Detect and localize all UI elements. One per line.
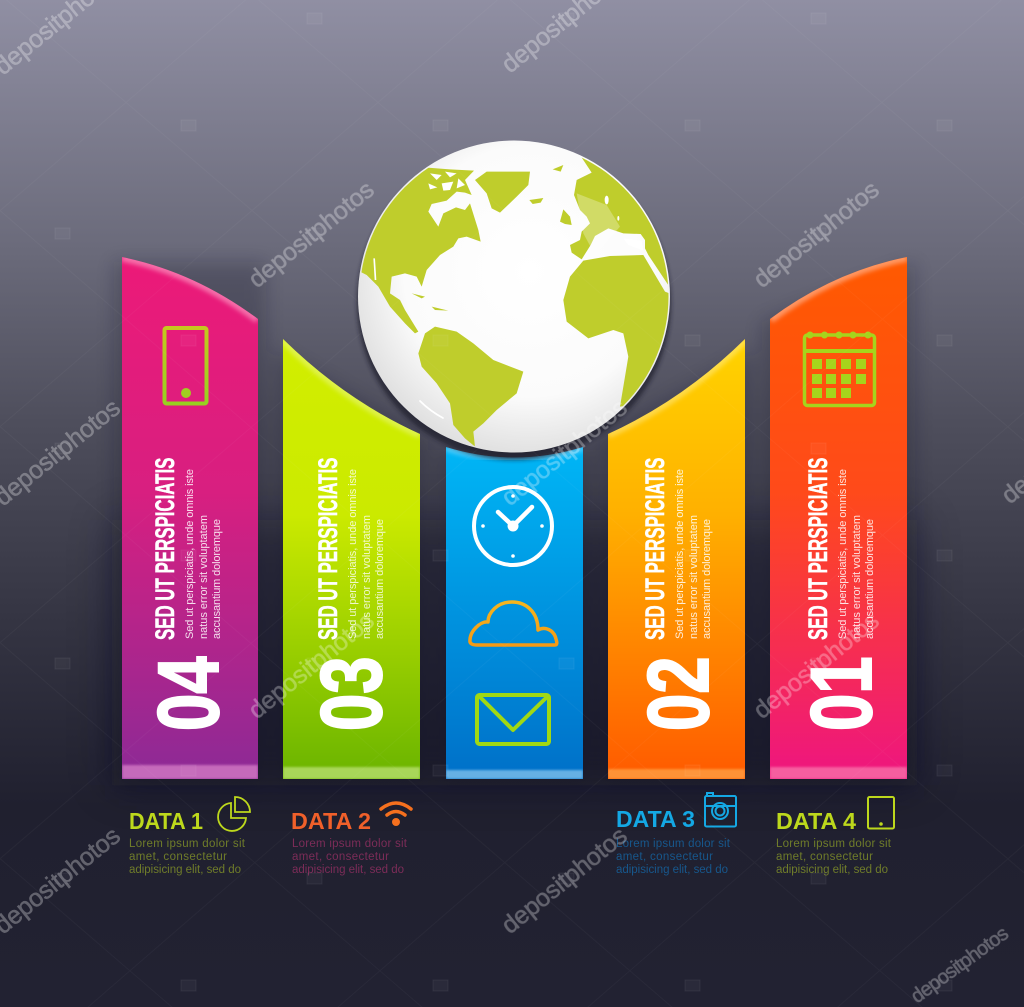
globe	[357, 140, 687, 452]
watermarks: depositphotos	[496, 394, 633, 512]
body text: Sed ut perspiciatis, unde omnis iste	[837, 469, 849, 639]
body text: accusantium doloremque	[864, 519, 876, 639]
text: Lorem ipsum dolor sit	[776, 838, 892, 850]
text	[616, 838, 731, 876]
body text	[837, 469, 876, 639]
heading: DATA 3	[616, 806, 695, 832]
text: amet, consectetur	[292, 851, 389, 863]
body text: natus error sit voluptatem	[198, 515, 210, 639]
heading: SED UT PERSPICIATIS	[150, 458, 180, 640]
number 04: 04	[141, 656, 237, 731]
legend: data 1	[129, 797, 250, 876]
text: adipisicing elit, sed do	[776, 864, 888, 876]
text: adipisicing elit, sed do	[616, 864, 728, 876]
icon: envelope	[477, 695, 549, 744]
text: Lorem ipsum dolor sit	[616, 838, 731, 850]
legend: data 4	[776, 797, 894, 876]
text	[776, 838, 892, 876]
watermarks: depositphotos	[748, 607, 885, 725]
body text: natus error sit voluptatem	[851, 515, 863, 639]
continents	[361, 158, 668, 446]
icon: pie chart	[218, 797, 250, 831]
text	[292, 838, 408, 876]
globe highlight	[420, 401, 443, 418]
body text	[674, 469, 713, 639]
panel: bar 04	[122, 257, 258, 779]
text: Lorem ipsum dolor sit	[129, 838, 246, 850]
icon: smartphone	[164, 328, 206, 404]
legend: data 2	[291, 803, 411, 876]
body text	[347, 469, 386, 639]
watermarks: depositphotos	[748, 176, 885, 294]
heading: DATA 2	[291, 808, 371, 834]
body text: accusantium doloremque	[701, 519, 713, 639]
bar shadows	[112, 262, 917, 786]
heading: DATA 4	[776, 808, 856, 834]
heading: SED UT PERSPICIATIS	[803, 458, 833, 640]
text: Lorem ipsum dolor sit	[292, 838, 408, 850]
panel: bar 02	[608, 339, 745, 779]
text	[129, 838, 246, 876]
icon: clock	[474, 487, 552, 565]
text: adipisicing elit, sed do	[129, 864, 241, 876]
icon: tablet	[868, 797, 894, 828]
watermarks: depositphotos	[243, 607, 380, 725]
heading: SED UT PERSPICIATIS	[313, 458, 343, 640]
icon: camera	[705, 793, 736, 826]
body text: Sed ut perspiciatis, unde omnis iste	[674, 469, 686, 639]
heading: DATA 1	[129, 808, 203, 834]
watermarks: depositphotos	[496, 822, 633, 940]
watermarks: depositphotos	[907, 923, 1013, 1007]
panel: bar 01	[770, 257, 907, 779]
number 02: 02	[631, 656, 727, 731]
panel: bar 03	[283, 339, 420, 779]
body text: Sed ut perspiciatis, unde omnis iste	[347, 469, 359, 639]
legend: data 3	[616, 793, 736, 876]
text: amet, consectetur	[616, 851, 713, 863]
text: adipisicing elit, sed do	[292, 864, 404, 876]
watermarks: depositphotos	[243, 176, 380, 294]
body text: natus error sit voluptatem	[361, 515, 373, 639]
body text	[184, 469, 223, 639]
globe shadow	[357, 146, 671, 460]
panel: bar center	[446, 447, 583, 779]
icon: calendar	[804, 332, 874, 406]
icon: wifi	[381, 803, 411, 826]
icon: cloud	[470, 602, 557, 645]
body text: natus error sit voluptatem	[688, 515, 700, 639]
heading: SED UT PERSPICIATIS	[640, 458, 670, 640]
text: amet, consectetur	[129, 851, 227, 863]
number 01: 01	[794, 656, 890, 731]
number 03: 03	[304, 656, 400, 731]
body text: accusantium doloremque	[374, 519, 386, 639]
body text: accusantium doloremque	[211, 519, 223, 639]
text: amet, consectetur	[776, 851, 873, 863]
body text: Sed ut perspiciatis, unde omnis iste	[184, 469, 196, 639]
